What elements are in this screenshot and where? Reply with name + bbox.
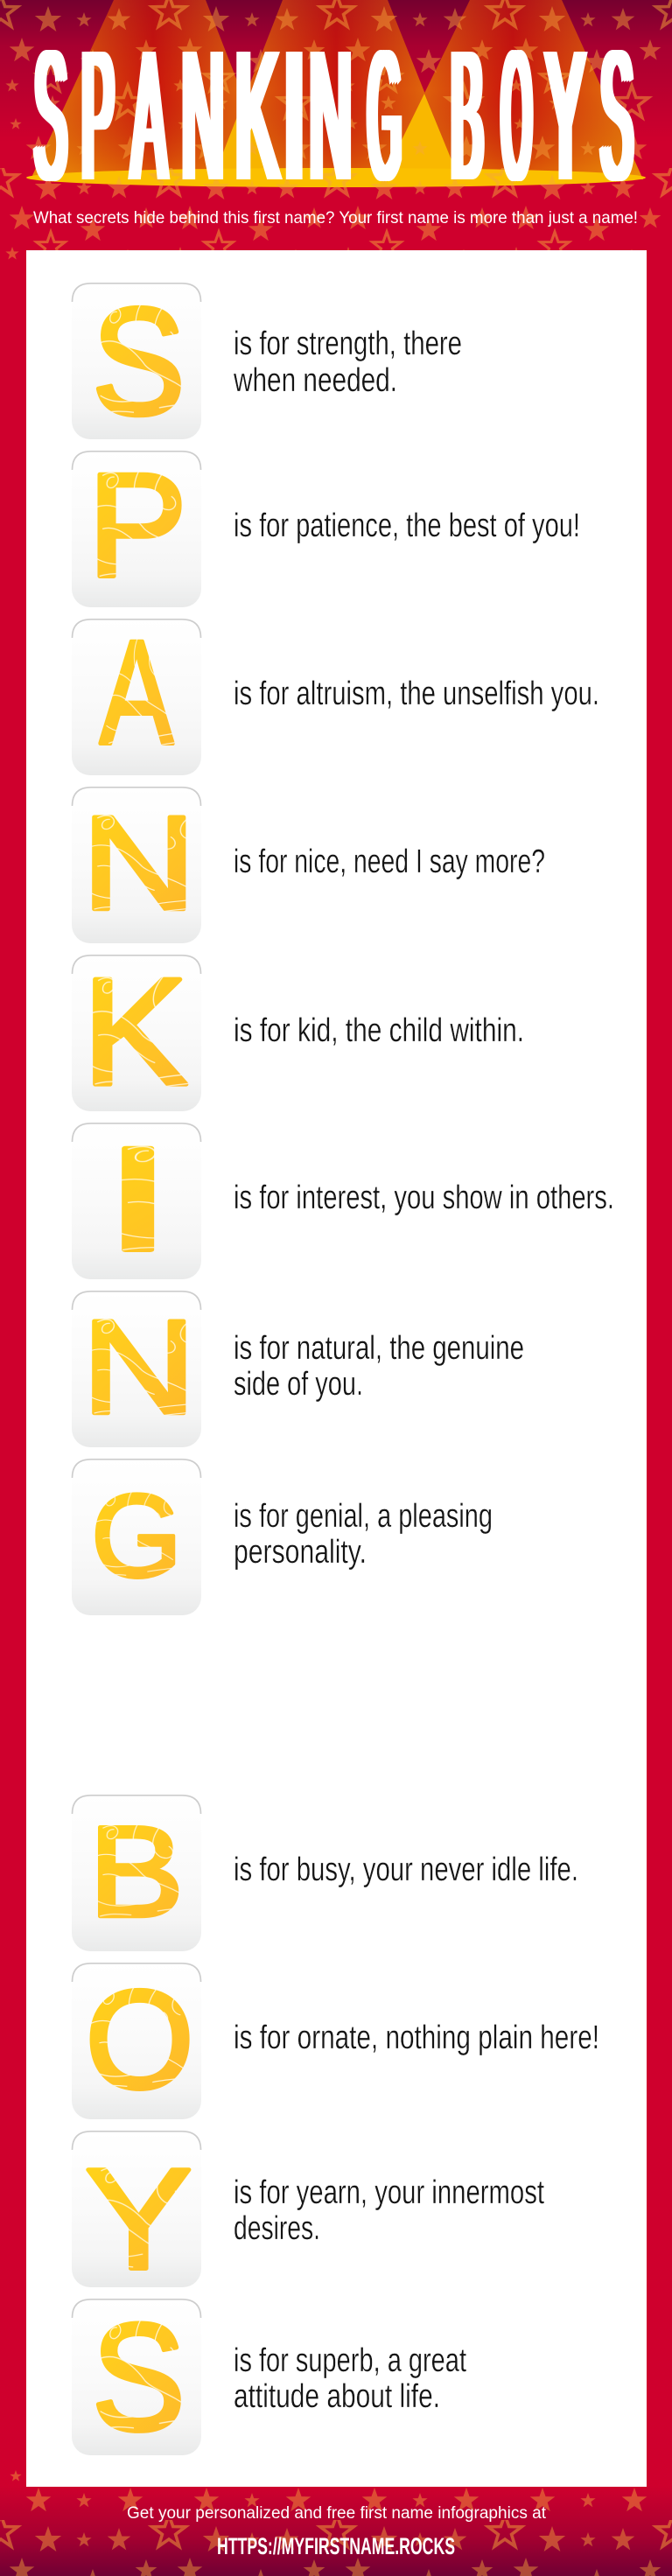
letter: P: P (88, 443, 187, 608)
title: I (276, 10, 303, 219)
letter: S last: S (92, 2292, 186, 2462)
tile: S last (72, 2299, 201, 2455)
title: S (597, 10, 628, 219)
footer url: HTTPS://MYFIRSTNAME.ROCKS (217, 2533, 455, 2559)
text: S last: attitude about life. (234, 2378, 440, 2415)
text: Y: is for yearn, your innermost (234, 2174, 544, 2211)
title: Y (542, 10, 581, 219)
row: N second (72, 1291, 524, 1447)
row: O (72, 1961, 599, 2119)
tile: O (72, 1963, 201, 2119)
letter: I: I (102, 1116, 174, 1282)
title: N (305, 10, 347, 219)
row: K (72, 946, 524, 1116)
letter: O: O (85, 1961, 194, 2118)
title: S (30, 10, 62, 219)
letter: K: K (82, 946, 188, 1116)
row: I (72, 1116, 614, 1282)
text: G: is for genial, a pleasing (234, 1498, 493, 1535)
title: A (128, 10, 163, 219)
star pattern: top (0, 0, 672, 264)
tile: N (72, 787, 201, 943)
row: Y (72, 2131, 544, 2299)
letter: A: A (100, 609, 174, 775)
tile: K (72, 955, 201, 1111)
row: G (72, 1459, 493, 1615)
row: B (72, 1795, 578, 1951)
text: S: is for strength, there (234, 326, 462, 362)
text: N second: side of you. (234, 1366, 363, 1403)
text: N second: is for natural, the genuine (234, 1330, 524, 1367)
letter: B: B (88, 1800, 184, 1944)
title: O (498, 10, 528, 219)
letter: S: S (92, 277, 186, 446)
text: S: when needed. (233, 362, 397, 399)
letter: G: G (91, 1469, 182, 1602)
letter: N second: N (81, 1292, 196, 1442)
tile: P (72, 451, 201, 607)
text: G: personality. (234, 1534, 367, 1571)
star pattern: bottom (0, 2468, 672, 2576)
tile: I (72, 1123, 201, 1279)
title: P (78, 10, 109, 219)
tile: G (72, 1459, 201, 1615)
row: S (72, 277, 462, 446)
row: P (72, 443, 580, 608)
text: K: is for kid, the child within. (234, 1012, 524, 1049)
tile: Y (72, 2131, 201, 2287)
spotlights (26, 0, 646, 187)
tile: S (72, 283, 201, 439)
subtitle: What secrets hide behind this first name? Your first name is more than just a name! (33, 209, 638, 228)
title: B (447, 10, 479, 219)
row: A (72, 609, 599, 775)
text: B: is for busy, your never idle life. (234, 1852, 578, 1888)
row: S last (72, 2292, 466, 2462)
tile: A (72, 619, 201, 775)
footer call to action: Get your personalized and free first name infographics at (127, 2504, 547, 2523)
letter: N: N (81, 788, 196, 938)
text: N: is for nice, need I say more? (234, 844, 545, 880)
row: N (72, 787, 545, 943)
tile: B (72, 1795, 201, 1951)
title: N (178, 10, 220, 219)
text: S last: is for superb, a great (234, 2342, 466, 2379)
title: G (364, 10, 397, 219)
title (30, 10, 635, 219)
title: K (231, 10, 276, 219)
tile: N second (72, 1291, 201, 1447)
text: Y: desires. (234, 2210, 320, 2247)
letter: Y: Y (85, 2138, 192, 2299)
